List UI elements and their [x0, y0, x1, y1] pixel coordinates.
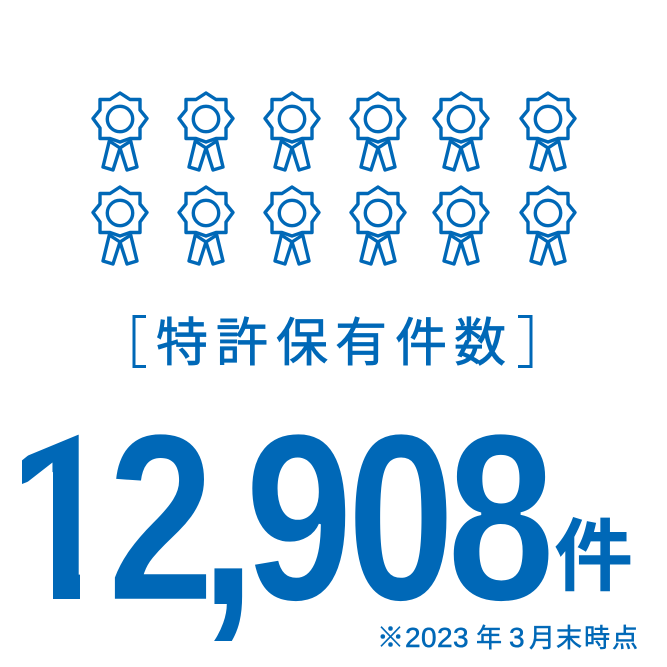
footnote: as of March 2023: 2023: [405, 622, 469, 653]
big number: 12,908: 2: [107, 385, 215, 652]
icon: medal 11: [434, 187, 488, 264]
footnote: as of March 2023: 月末時点: [529, 623, 638, 653]
heading: patents held: [134, 315, 531, 373]
icon: medal 3: [265, 93, 319, 170]
big number: 12,908: 1: [8, 383, 114, 650]
icon: medal 6: [521, 93, 575, 170]
footnote: as of March 2023: 3: [509, 622, 525, 653]
big number: 12,908: 8: [447, 385, 555, 651]
left bracket: [134, 316, 146, 366]
right bracket: [518, 316, 531, 366]
icon: medal 10: [351, 187, 405, 264]
footnote: as of March 2023: ※: [377, 623, 404, 653]
unit: ken: 件: [554, 512, 633, 601]
big number: 12,908: 0: [347, 385, 455, 651]
icon: medal 4: [351, 93, 405, 170]
icon: medal 8: [179, 187, 233, 264]
big number: 12,908: 9: [245, 385, 353, 651]
icon: medal 7: [93, 187, 147, 264]
icon row: bottom row of medals: [93, 187, 575, 264]
heading text: 特許保有件数: [156, 315, 506, 373]
icon: medal 9: [265, 187, 319, 264]
icon: medal 2: [179, 93, 233, 170]
icon row: top row of medals: [93, 93, 575, 170]
big number: 12,908: ,: [201, 389, 255, 655]
big number: 12,908: [22, 434, 548, 641]
footnote: as of March 2023: 年: [476, 623, 502, 653]
icon: medal 1: [93, 93, 147, 170]
icon: medal 12: [521, 187, 575, 264]
icon: medal 5: [434, 93, 488, 170]
